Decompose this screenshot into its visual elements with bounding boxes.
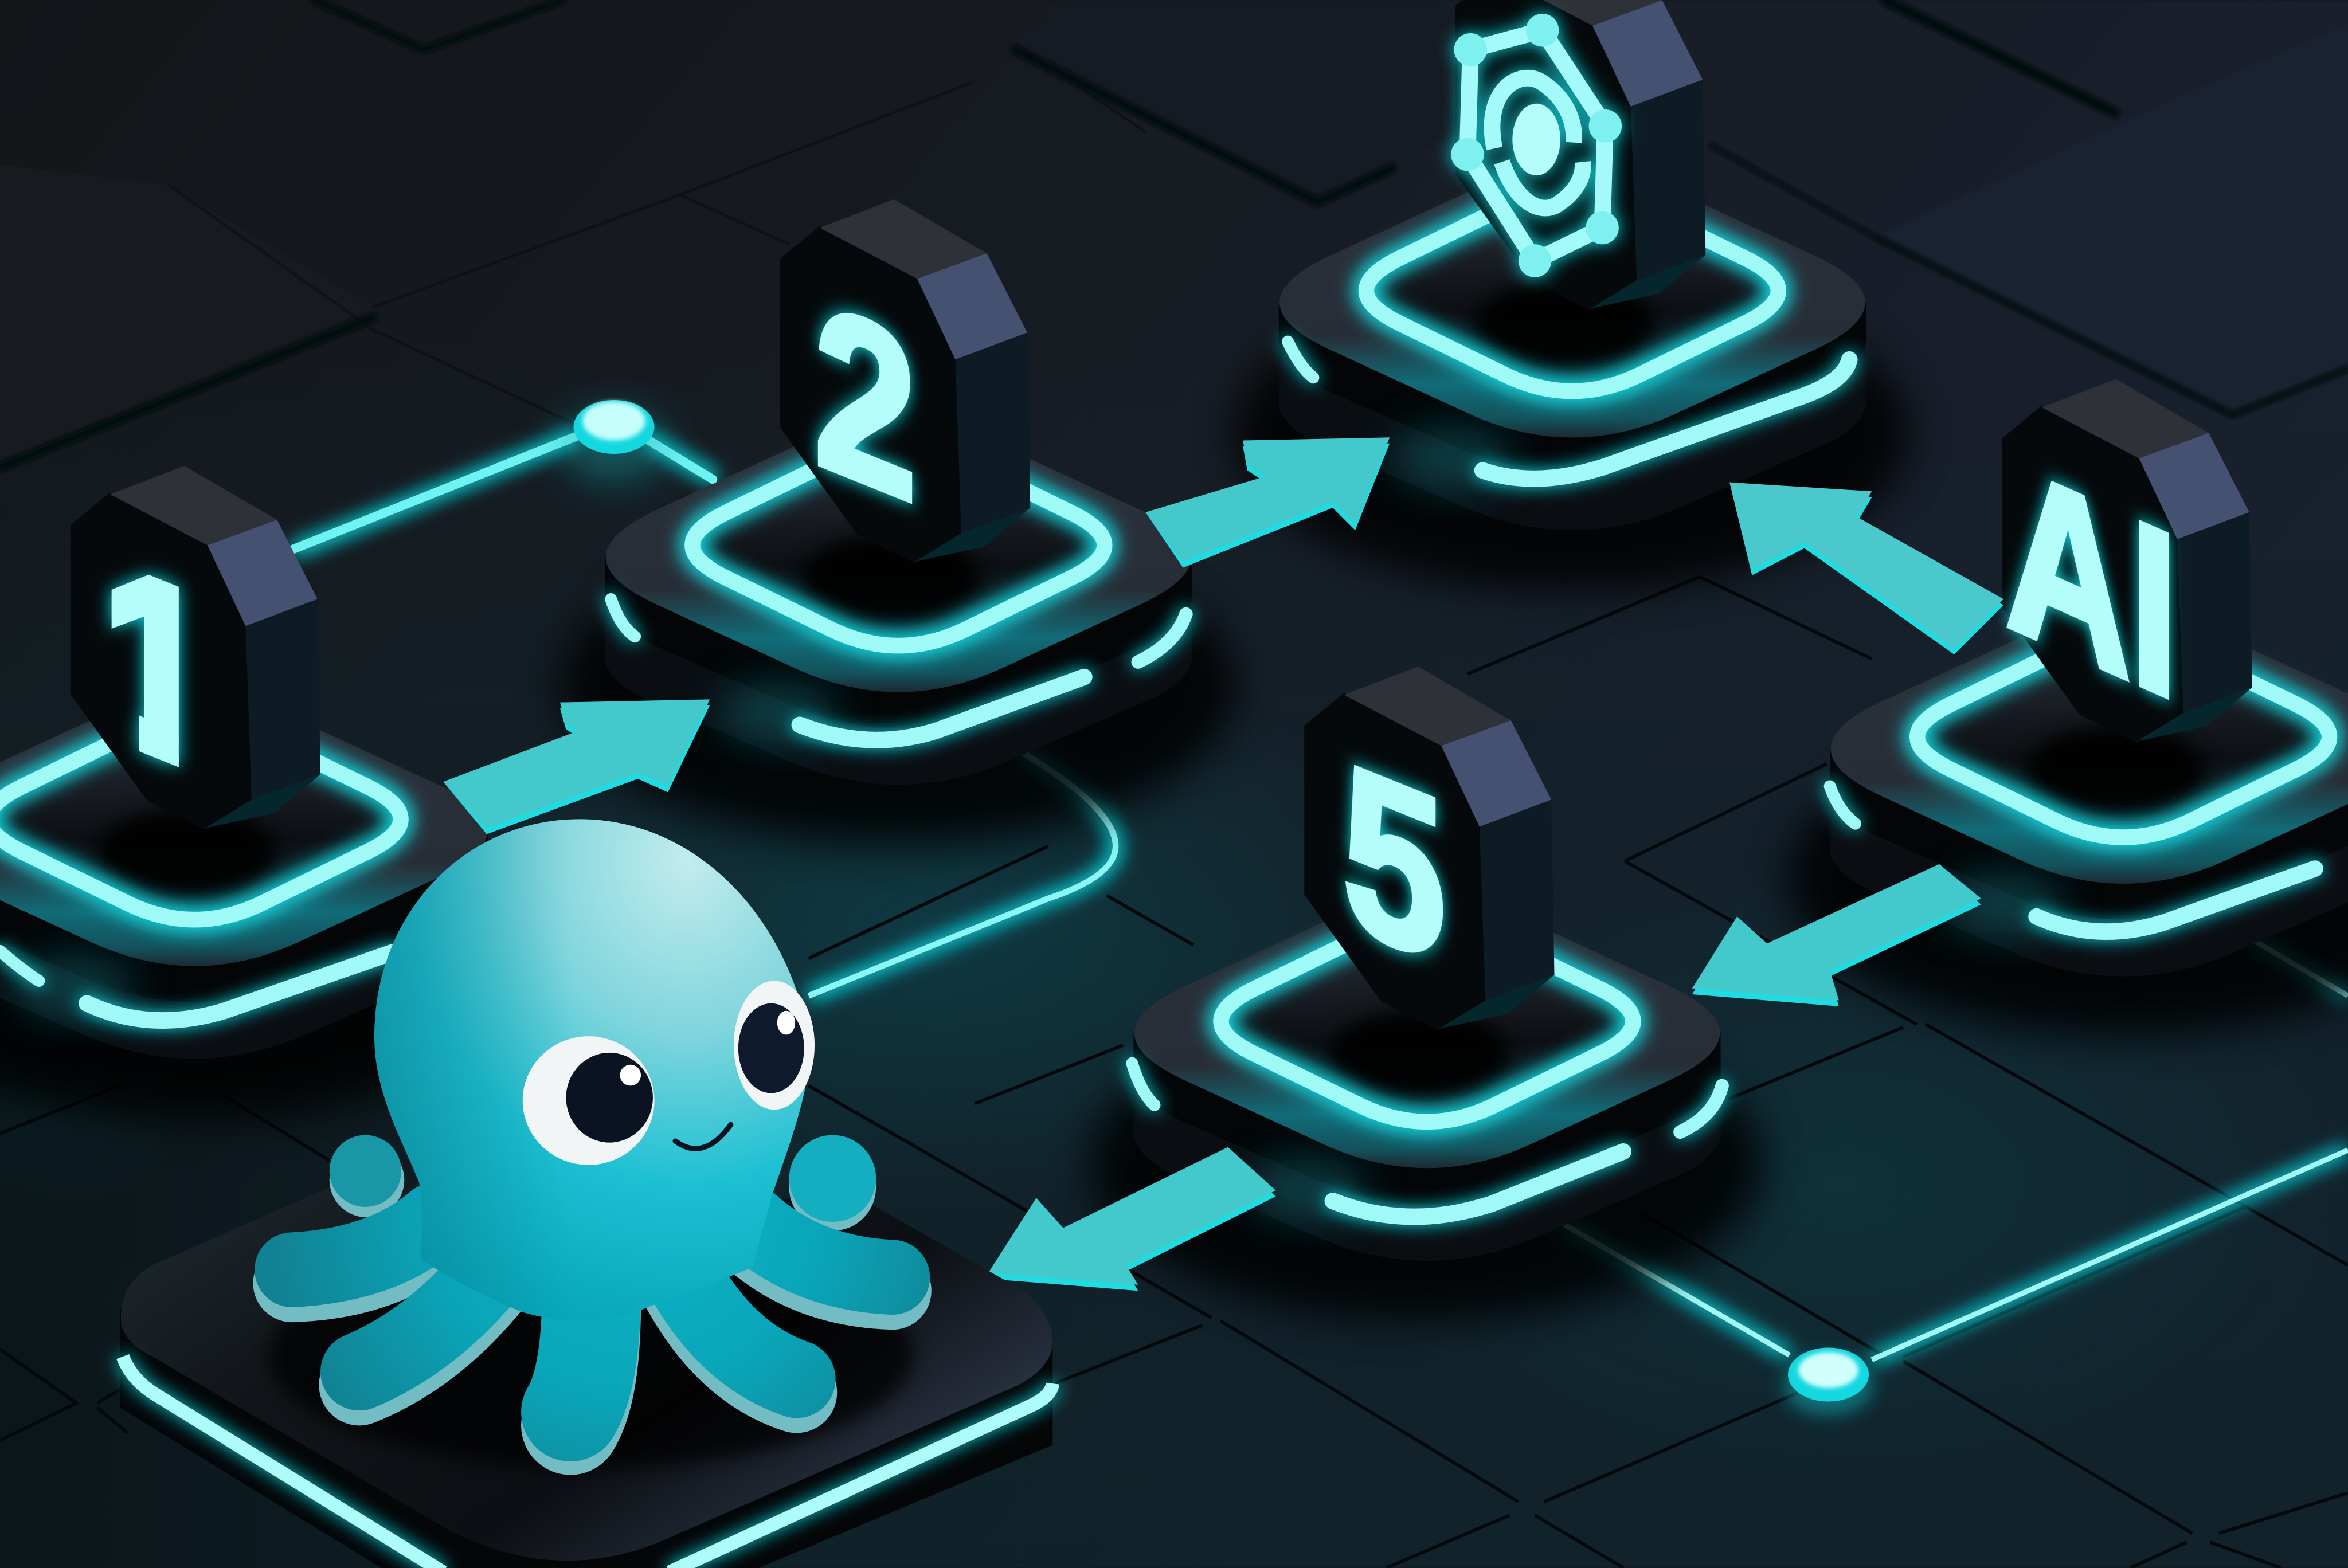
numeral 1: 1	[102, 508, 212, 828]
platform 1 light strips	[0, 951, 392, 1021]
back tentacles	[330, 1135, 876, 1231]
mascot base platform	[120, 1187, 1053, 1568]
pillar 5 with numeral	[1306, 667, 1555, 1029]
label AI: AI	[2006, 414, 2178, 750]
platform 1	[0, 696, 531, 1119]
neon connector: lower right with node	[1565, 940, 2348, 1415]
octopus head and body	[374, 819, 810, 1321]
tentacle undersides	[292, 1220, 893, 1425]
octopus mascot	[269, 819, 913, 1467]
platform 2 light strips	[611, 599, 1186, 740]
neon connector: step 1 to node to step 2	[292, 400, 716, 551]
icon: network hexagon	[1451, 14, 1622, 277]
floor tile grid	[0, 577, 2348, 1568]
base shadow	[269, 1243, 913, 1467]
numeral 2: 2	[814, 252, 917, 553]
arrow: step 5 to mascot	[988, 1147, 1276, 1291]
neon connector: step 2 to mascot	[809, 752, 1116, 996]
arrow: step 2 to step 3	[1145, 437, 1390, 568]
arrow: AI to step 3	[1729, 483, 2003, 654]
platform 5	[1090, 899, 1764, 1320]
smile	[675, 1124, 731, 1148]
pillar AI with label	[2003, 379, 2252, 750]
body left shading	[374, 819, 810, 1321]
panel shadow edges	[0, 0, 2348, 468]
right eye	[734, 981, 815, 1110]
arrow: step 1 to step 2	[443, 699, 710, 834]
platform AI light strips	[1830, 786, 2315, 932]
tentacles	[292, 1205, 893, 1412]
platform AI	[1786, 614, 2348, 1036]
pillar 3 with network icon	[1451, 0, 1705, 309]
arrow: AI to step 5	[1692, 864, 1981, 1006]
base light strips	[123, 1357, 1052, 1568]
numeral 5: 5	[1343, 714, 1446, 1014]
pillar 2 with numeral	[782, 199, 1030, 562]
platform 5 light strips	[1132, 1063, 1722, 1217]
left eye	[523, 1036, 655, 1165]
platform 3	[1235, 168, 1909, 590]
platform 2	[562, 422, 1235, 845]
platform 3 light strips	[1288, 342, 1849, 479]
pillar 1 with numeral	[72, 466, 320, 828]
